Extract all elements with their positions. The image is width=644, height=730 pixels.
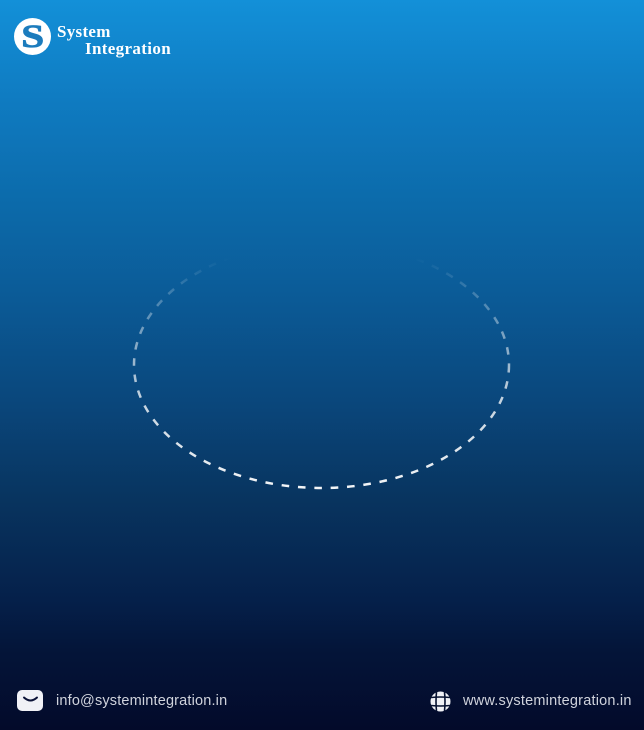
logo wordmark: Integration: Integration bbox=[85, 39, 171, 58]
icon: envelope bbox=[17, 690, 43, 711]
logo bbox=[14, 18, 171, 58]
footer website bbox=[430, 692, 632, 712]
icon: globe bbox=[430, 692, 450, 712]
logo icon: S in circle bbox=[14, 18, 51, 55]
email text: info@systemintegration.in bbox=[56, 693, 227, 709]
footer email bbox=[17, 690, 227, 711]
logo icon: S in circle: S bbox=[21, 19, 44, 55]
website text: www.systemintegration.in bbox=[463, 693, 632, 709]
logo wordmark: System: System bbox=[57, 22, 111, 41]
